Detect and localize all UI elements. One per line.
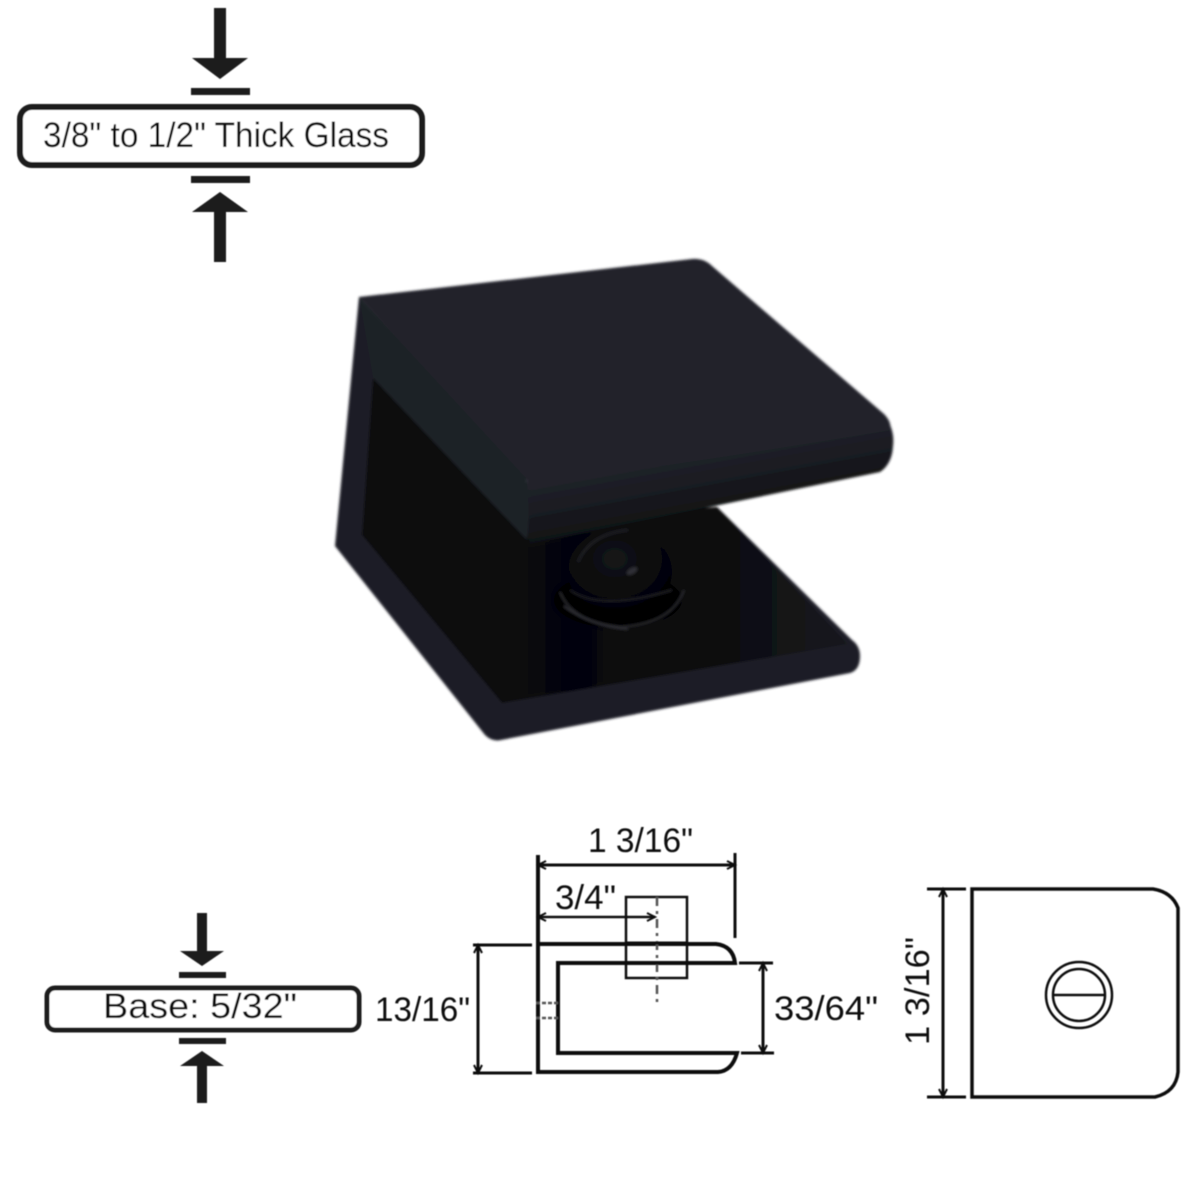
arrow: down to base: [180, 913, 224, 966]
label box: base thickness: Base: 5/32": [103, 987, 297, 1026]
dimension: 1 3/16 height: [927, 889, 966, 1097]
front view technical drawing: [899, 889, 1178, 1097]
top plate front edge: [525, 416, 893, 544]
label box: glass thickness: [20, 107, 422, 165]
label box: base thickness: [47, 987, 359, 1030]
icon: slotted screw head: [1046, 962, 1112, 1028]
plate outline: [972, 889, 1178, 1097]
icon: set screw: [554, 528, 684, 629]
upper base limit bar: [179, 972, 226, 978]
clamp frame and base edge: [335, 297, 860, 740]
side view technical drawing: [375, 822, 878, 1073]
label: 3/4: 3/4": [555, 879, 616, 917]
hidden hole lines: [536, 1003, 558, 1018]
dimension: 13/16 height: [473, 945, 532, 1073]
upper limit bar: [191, 88, 250, 95]
label: 1 3/16 width: 1 3/16": [588, 822, 693, 860]
arrow: up to glass: [192, 192, 248, 262]
lower limit bar: [191, 176, 250, 183]
label: 13/16: 13/16": [375, 991, 470, 1029]
dimension: 3/4 to screw: [538, 913, 655, 921]
clamp profile: [538, 855, 737, 1072]
callout: base thickness: [47, 913, 359, 1103]
callout: glass thickness: [20, 8, 422, 262]
cavity and base top face: [362, 378, 848, 703]
arrow: up to base: [180, 1051, 224, 1103]
label: 1 3/16 height: 1 3/16": [899, 937, 937, 1045]
dimension: 33/64 opening: [739, 963, 774, 1053]
lower base limit bar: [179, 1038, 226, 1044]
dimension: 1 3/16 width: [538, 853, 735, 938]
screw outline: [626, 897, 687, 1003]
product photo: black glass clamp: [335, 259, 893, 740]
left bevel strip: [359, 297, 529, 540]
label: 33/64: 33/64": [774, 990, 878, 1028]
label box: glass thickness: 3/8" to 1/2" Thick Glass: [43, 116, 389, 155]
top plate upper face: [359, 259, 890, 483]
arrow: down to glass: [192, 8, 248, 79]
